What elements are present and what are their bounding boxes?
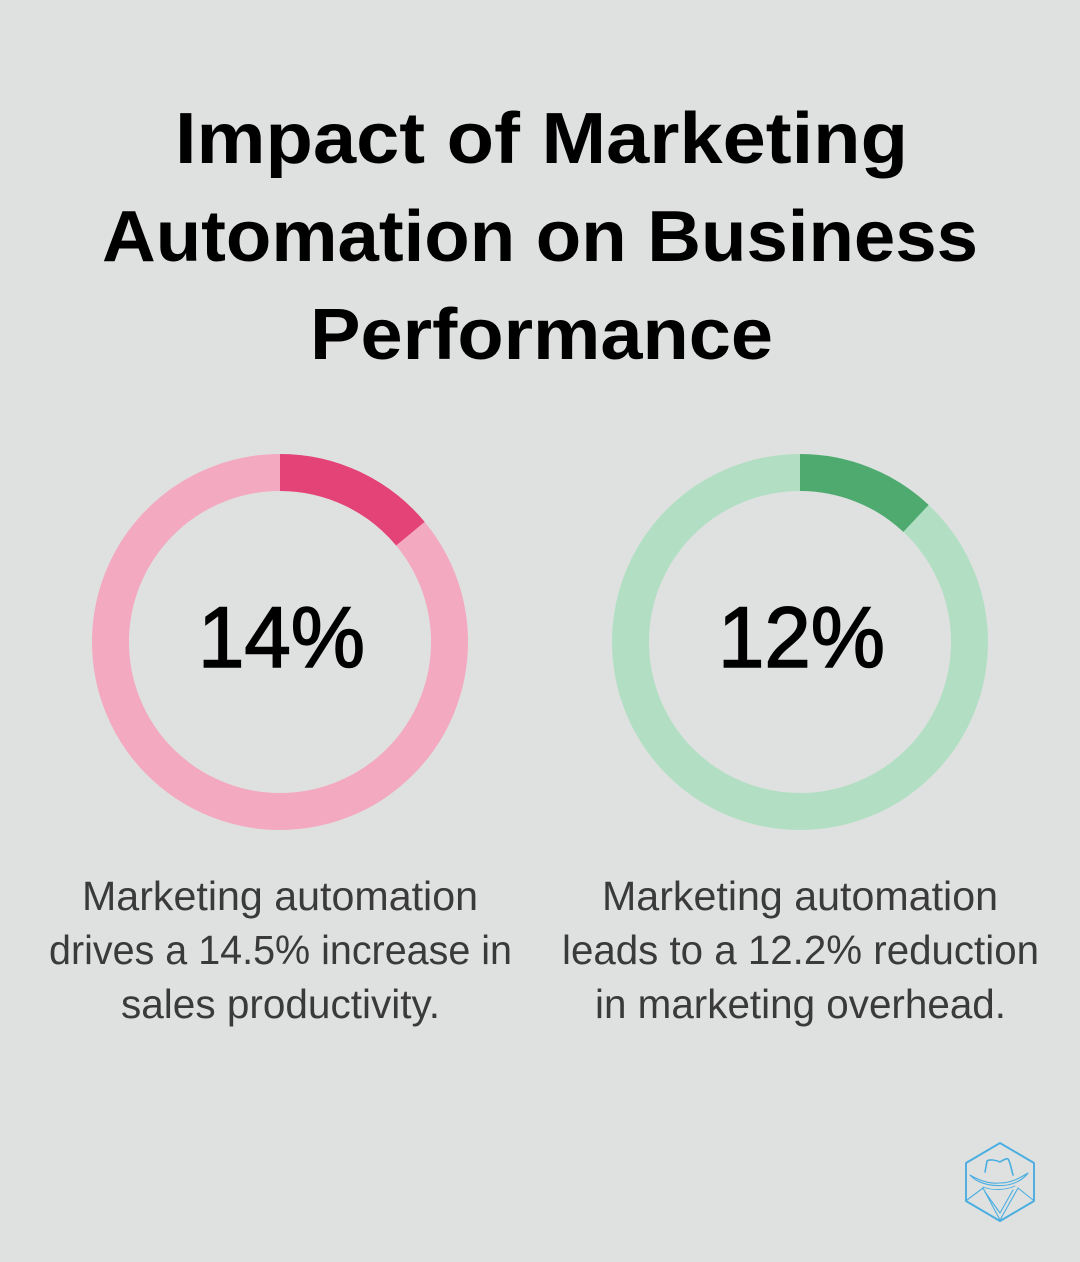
panel: sales productivity xyxy=(49,472,512,1027)
description: sales productivity: sales productivity. xyxy=(121,981,440,1027)
value: 12%: 12% xyxy=(718,590,885,686)
icon: hexagon logo with hat xyxy=(966,1143,1034,1221)
description: sales productivity: Marketing automation xyxy=(82,873,478,919)
title: Performance xyxy=(310,295,773,375)
description: marketing overhead: Marketing automation xyxy=(602,873,998,919)
value: 14%: 14% xyxy=(198,590,365,686)
description: sales productivity: drives a 14.5% increase in xyxy=(49,927,512,973)
donut chart: 14% xyxy=(110,472,450,812)
title xyxy=(102,99,978,375)
description: marketing overhead: in marketing overhead. xyxy=(595,981,1006,1027)
description: marketing overhead xyxy=(562,873,1039,1027)
description: sales productivity xyxy=(49,873,512,1027)
title: Automation on Business xyxy=(102,197,978,277)
donut chart: 12% xyxy=(630,472,970,812)
title: Impact of Marketing xyxy=(175,99,908,179)
description: marketing overhead: leads to a 12.2% reduction xyxy=(562,927,1039,973)
panel: marketing overhead xyxy=(562,472,1039,1027)
